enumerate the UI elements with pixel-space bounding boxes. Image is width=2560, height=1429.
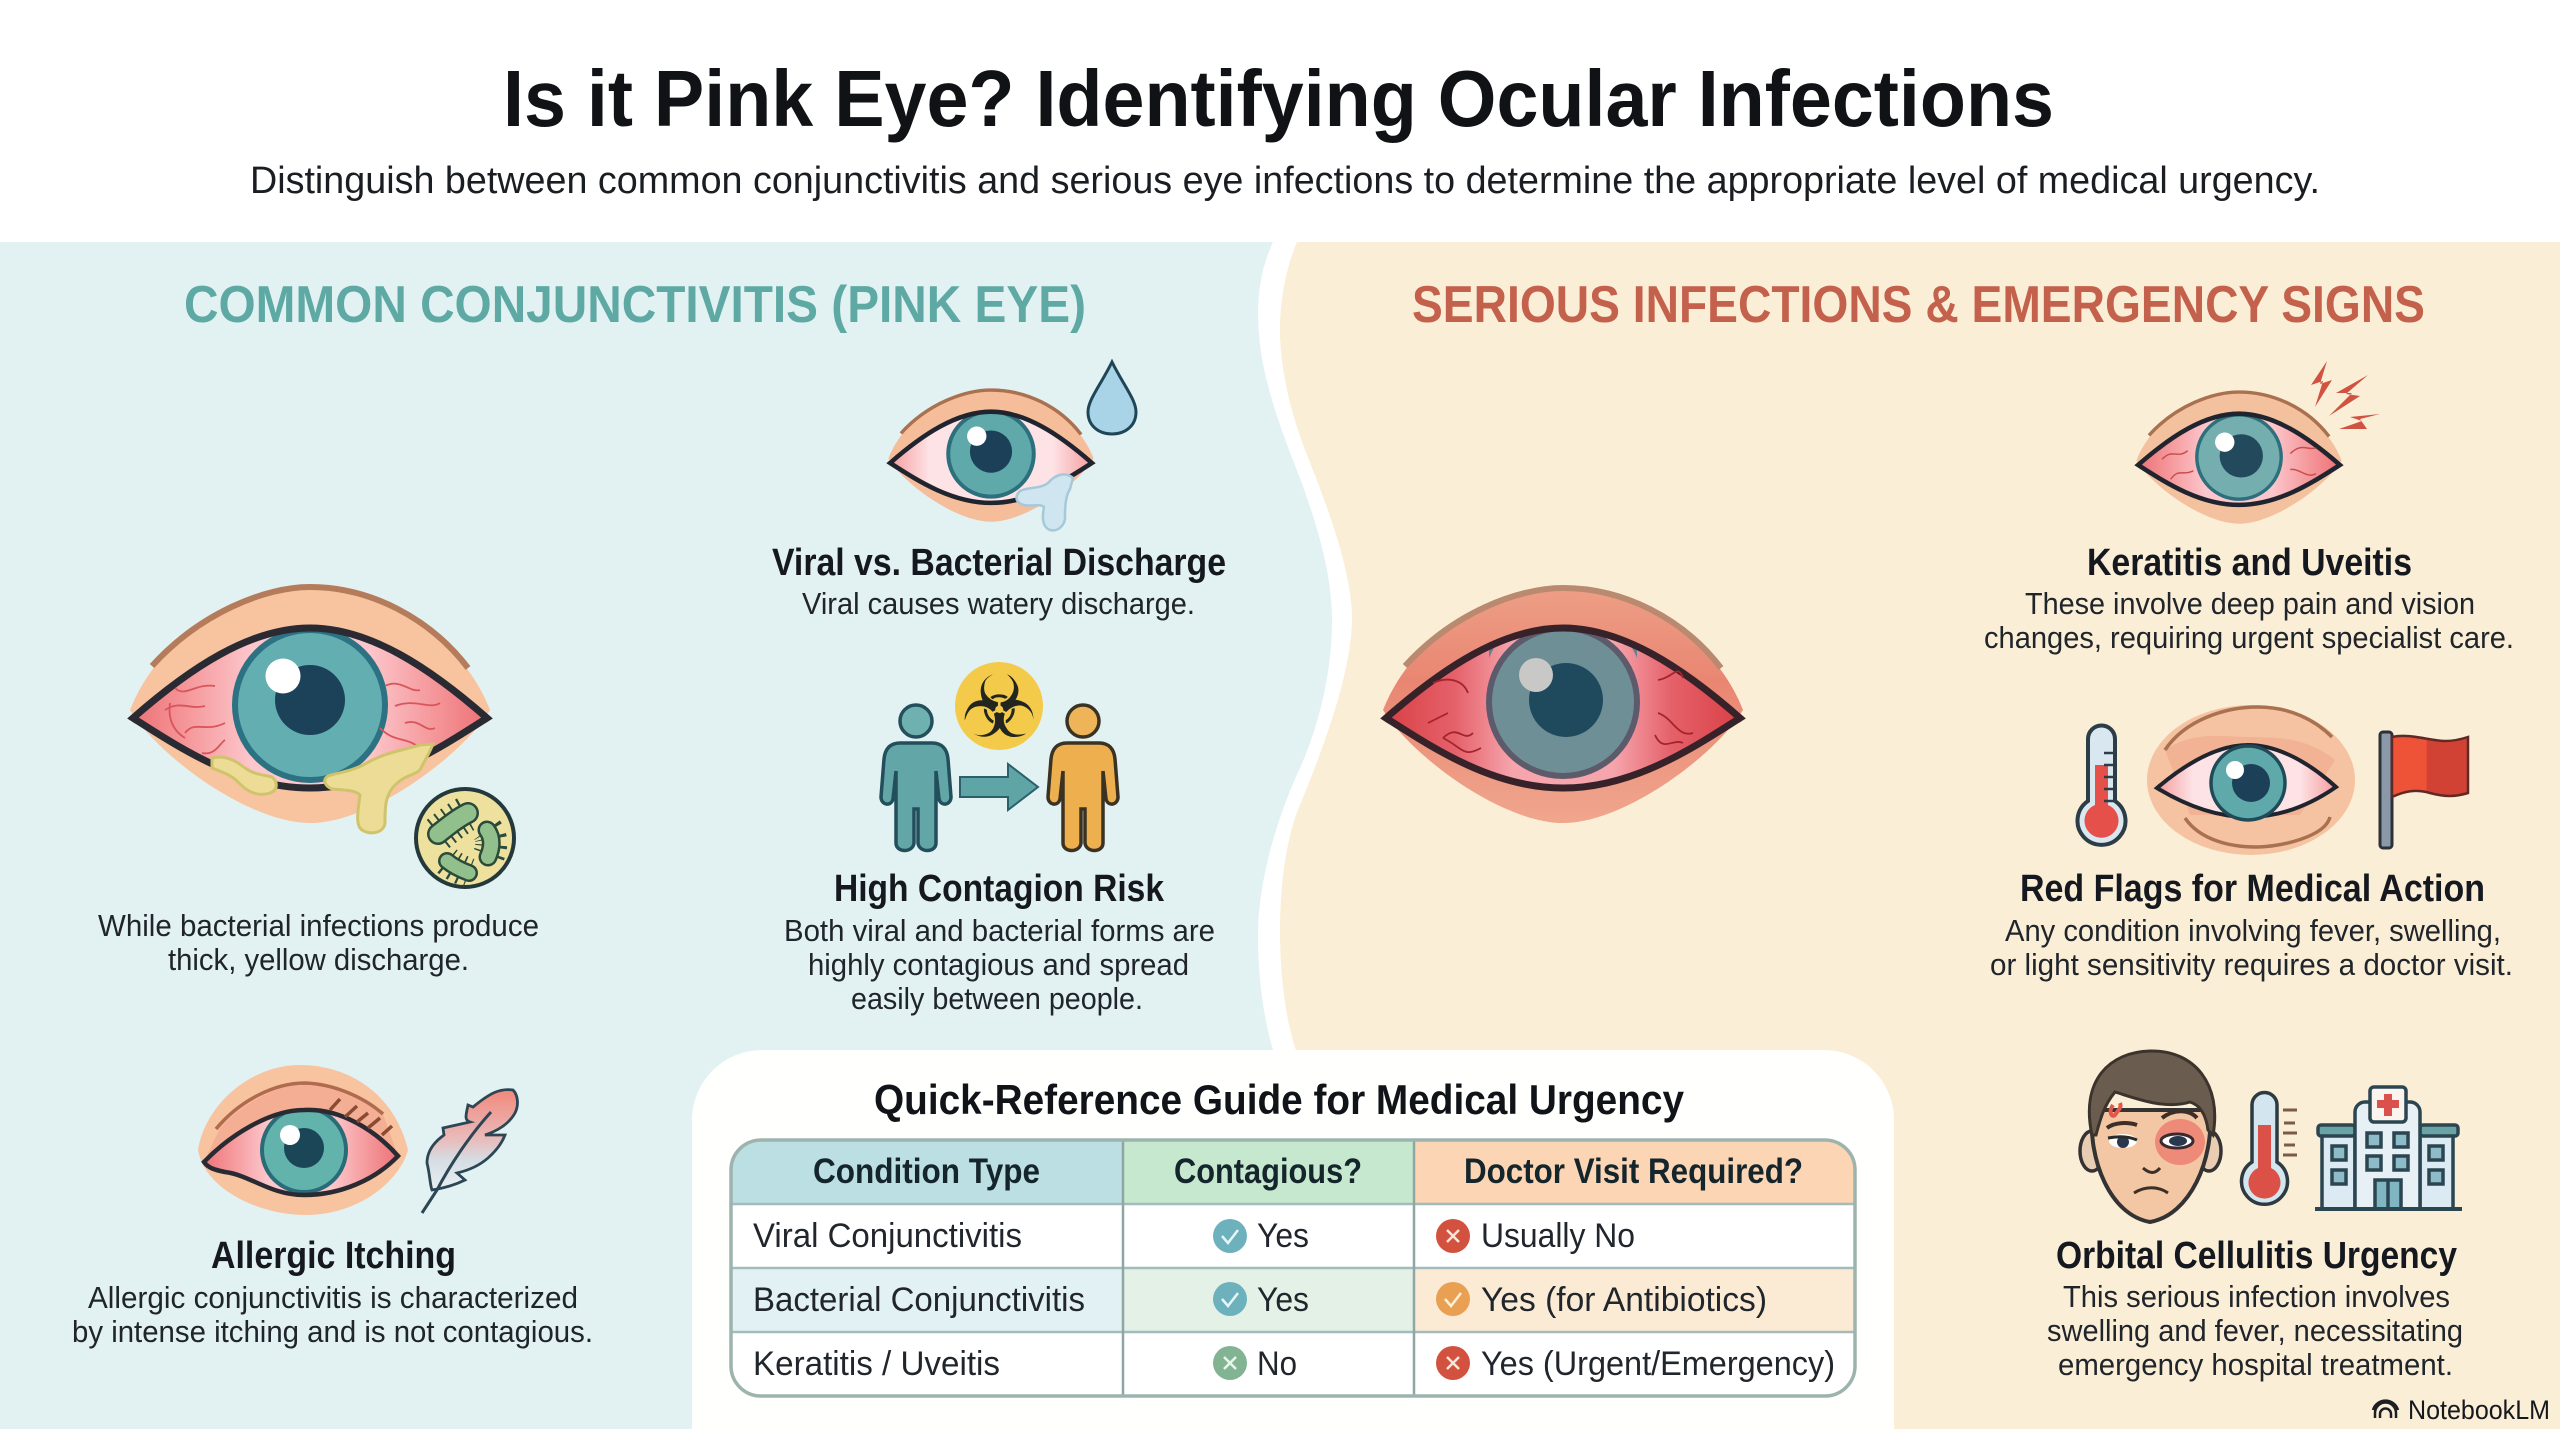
text: bacterial discharge [98,908,539,977]
table header [813,1152,1803,1191]
row: bacterial conjunctivitis [753,1281,1767,1319]
block: allergic itching: by intense itching and is not contagious. [72,1314,593,1349]
block: red flags: Red Flags for Medical Action [2020,868,2485,910]
block: allergic itching: Allergic conjunctivitis is characterized [88,1280,578,1315]
icon: hospital [2315,1087,2462,1209]
block: keratitis and uveitis: Keratitis and Uveitis [2087,542,2412,584]
block: orbital cellulitis: swelling and fever, necessitating [2047,1313,2463,1348]
row: bacterial conjunctivitis: Yes [1257,1281,1309,1319]
icon: pain bolts [2311,361,2380,429]
block: orbital cellulitis: emergency hospital treatment. [2058,1347,2453,1382]
table header: Doctor Visit Required? [1464,1152,1803,1191]
row: viral conjunctivitis [753,1217,1635,1255]
row: keratitis / uveitis: No [1257,1345,1297,1383]
icon: swollen eye [2147,705,2355,855]
icon: red flag [2380,732,2468,848]
subtitle: Distinguish between common conjunctivitis and serious eye infections to determine the appropriate level of medical urgency. [250,160,2320,202]
block: red flags: Any condition involving fever, swelling, [2005,913,2501,948]
icon: large eye with yellow discharge [130,585,490,833]
block: allergic itching: Allergic Itching [211,1235,456,1277]
panel: serious infections [1383,276,2514,1382]
block: high contagion risk [784,868,1215,1016]
block: red flags: or light sensitivity requires a doctor visit. [1990,947,2513,982]
block: keratitis and uveitis: changes, requiring urgent specialist care. [1984,620,2514,655]
panel: quick-reference guide card [692,1050,1894,1429]
table header: Contagious? [1174,1152,1362,1191]
tear [1017,474,1073,530]
icon: contagion people and biohazard [881,658,1118,850]
icon: viral watery eye [888,389,1094,530]
icon: face with orbital swelling [2080,1051,2221,1222]
row: keratitis / uveitis [753,1345,1835,1383]
icon: contagion people and biohazard: ☣ [960,658,1038,758]
heading: common conjunctivitis: COMMON CONJUNCTIVITIS (PINK EYE) [184,276,1086,334]
icon: keratitis eye [2136,391,2342,524]
NotebookLM badge: NotebookLM [2408,1395,2550,1425]
icon: water drop [1088,362,1136,434]
block: viral discharge: Viral vs. Bacterial Discharge [772,542,1226,584]
icon: feather [422,1090,517,1213]
block: viral discharge [772,542,1226,621]
text: bacterial discharge: While bacterial infections produce [98,908,539,943]
block: keratitis and uveitis: These involve deep pain and vision [2025,586,2475,621]
row: bacterial conjunctivitis: Bacterial Conjunctivitis [753,1281,1085,1319]
icon: large inflamed eye [1383,586,1743,823]
row: viral conjunctivitis: Viral Conjunctivitis [753,1217,1022,1255]
icon: allergic eye [198,1065,408,1215]
panel: common conjunctivitis [72,276,1226,1349]
title: Is it Pink Eye? Identifying Ocular Infections [503,54,2054,143]
text: bacterial discharge: thick, yellow discharge. [168,942,469,977]
row: viral conjunctivitis: Usually No [1481,1217,1635,1255]
row: keratitis / uveitis: Keratitis / Uveitis [753,1345,1000,1383]
table header: Condition Type [813,1152,1040,1191]
heading: quick-reference guide: Quick-Reference Guide for Medical Urgency [874,1076,1685,1123]
block: high contagion risk: Both viral and bacterial forms are [784,913,1215,948]
block: allergic itching [72,1235,593,1349]
block: orbital cellulitis [2047,1235,2463,1382]
block: orbital cellulitis: This serious infection involves [2063,1279,2450,1314]
block: red flags [1990,868,2513,982]
block: high contagion risk: easily between people. [851,981,1143,1016]
heading: serious infections: SERIOUS INFECTIONS & EMERGENCY SIGNS [1412,276,2425,334]
block: viral discharge: Viral causes watery discharge. [802,586,1195,621]
icon: thermometer [2242,1092,2297,1204]
icon: bacteria circle [416,789,514,887]
table: medical urgency [731,1140,1855,1396]
block: high contagion risk: High Contagion Risk [834,868,1165,910]
block: high contagion risk: highly contagious and spread [808,947,1189,982]
icon: fever thermometer [2078,726,2126,845]
row: bacterial conjunctivitis: Yes (for Antibiotics) [1481,1281,1767,1319]
block: keratitis and uveitis [1984,542,2514,655]
discharge [325,744,433,833]
block: orbital cellulitis: Orbital Cellulitis Urgency [2056,1235,2457,1277]
row: keratitis / uveitis: Yes (Urgent/Emergency) [1481,1345,1835,1383]
row: viral conjunctivitis: Yes [1257,1217,1309,1255]
